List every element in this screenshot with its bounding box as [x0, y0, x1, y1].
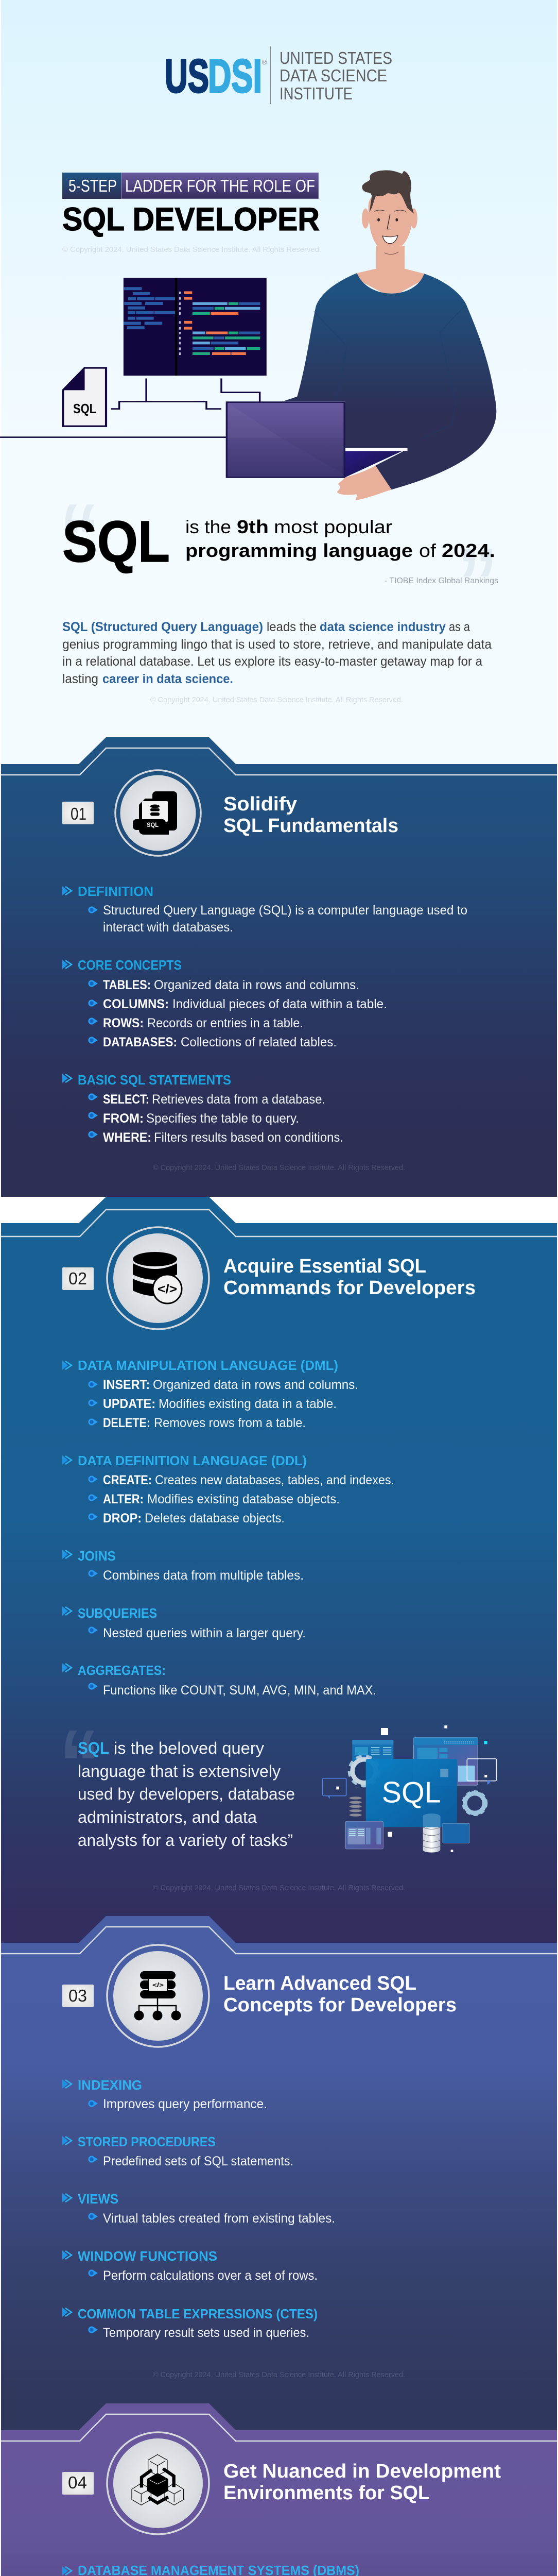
item: DML: [62, 1358, 358, 1430]
item: DDL: DATA DEFINITION LANGUAGE (DDL): [78, 1453, 307, 1468]
opening quote mark: “: [59, 484, 100, 593]
header logo: DSI: [208, 50, 262, 103]
SQL file label: SQL: [73, 401, 96, 416]
header logo: ®: [262, 58, 267, 66]
intro paragraph: lasting: [62, 672, 98, 686]
panel: step 04 development environments: [1, 2403, 557, 2576]
item: DML: DATA MANIPULATION LANGUAGE (DML): [78, 1358, 338, 1373]
item: joins: [62, 1548, 304, 1583]
item: basic SQL statements: FROM:: [103, 1111, 144, 1126]
item: core concepts: Collections of related tables.: [181, 1035, 337, 1049]
callout quote: used by developers, database: [78, 1785, 295, 1803]
icon: laptop: [226, 402, 408, 477]
item: window functions: [62, 2248, 318, 2283]
icon: database with code tag: [107, 1227, 209, 1329]
copyright: © Copyright 2024. United States Data Science Institute. All Rights Reserved.: [150, 696, 403, 704]
header logo: US: [165, 50, 209, 103]
item: definition: interact with databases.: [103, 920, 233, 935]
heading: [223, 1973, 457, 2016]
copyright: © Copyright 2024. United States Data Science Institute. All Rights Reserved.: [153, 1884, 405, 1892]
intro paragraph: SQL (Structured Query Language): [62, 620, 263, 634]
item: window functions: WINDOW FUNCTIONS: [78, 2248, 217, 2264]
item: joins: Combines data from multiple tables.: [103, 1568, 304, 1583]
item: aggregates: Functions like COUNT, SUM, AVG, MIN, and MAX.: [103, 1683, 376, 1698]
icon: database with code tag: </>: [158, 1282, 177, 1296]
stat quote: TIOBE ranking: of: [419, 540, 437, 561]
badge 02: [62, 1267, 94, 1290]
icon: connected cubes: [107, 2432, 209, 2534]
stat quote: TIOBE ranking: 2024.: [442, 540, 495, 561]
item: core concepts: ROWS:: [103, 1016, 144, 1030]
item: basic SQL statements: BASIC SQL STATEMENTS: [78, 1072, 231, 1088]
item: basic SQL statements: WHERE:: [103, 1130, 151, 1145]
item: basic SQL statements: SELECT:: [103, 1092, 149, 1107]
item: basic SQL statements: Specifies the table to query.: [146, 1111, 299, 1126]
icon: SQL document in circle: SQL: [147, 821, 159, 828]
heading: Commands for Developers: [223, 1277, 476, 1299]
header logo: UNITED STATES: [280, 48, 392, 67]
heading: Learn Advanced SQL: [223, 1973, 416, 1994]
icon: server hierarchy: </>: [152, 1981, 164, 1989]
item: common table expressions: Temporary result sets used in queries.: [103, 2326, 309, 2340]
copyright: © Copyright 2024. United States Data Science Institute. All Rights Reserved.: [153, 2371, 405, 2379]
item: common table expressions: COMMON TABLE EXPRESSIONS (CTES): [78, 2306, 318, 2321]
item: DDL: DROP:: [103, 1511, 142, 1526]
item: indexing: INDEXING: [78, 2077, 142, 2093]
badge 03: 03: [68, 1986, 87, 2005]
stat quote: TIOBE ranking: programming language: [185, 540, 413, 561]
icon: SQL file: [63, 368, 106, 426]
stat quote: TIOBE ranking: - TIOBE Index Global Rankings: [385, 577, 498, 585]
item: indexing: Improves query performance.: [103, 2097, 267, 2111]
panel: step 01 solidify SQL fundamentals: [1, 737, 557, 1197]
icon: SQL document in circle: [115, 770, 201, 856]
person: [283, 171, 496, 500]
table line: [0, 436, 228, 438]
badge 01: 01: [71, 804, 86, 823]
title banner: 5-STEP: [68, 176, 117, 195]
page background top: [1, 0, 557, 773]
icon: code monitor: [124, 278, 267, 376]
item: stored procedures: Predefined sets of SQL statements.: [103, 2154, 293, 2168]
item: common table expressions: [62, 2306, 318, 2340]
panel: step 03 advanced SQL concepts: [1, 1916, 557, 2430]
item: indexing: [62, 2077, 267, 2111]
badge 03: [62, 1985, 94, 2007]
item: DML: Organized data in rows and columns.: [153, 1378, 358, 1392]
copyright: © Copyright 2024. United States Data Science Institute. All Rights Reserved.: [62, 246, 321, 254]
item: views: VIEWS: [78, 2191, 118, 2207]
item: stored procedures: STORED PROCEDURES: [78, 2134, 216, 2149]
intro paragraph: [62, 620, 492, 686]
intro paragraph: leads the: [267, 620, 317, 634]
stat quote: TIOBE ranking: [59, 484, 498, 637]
item: subqueries: SUBQUERIES: [78, 1605, 157, 1621]
illustration: SQL panel with windows and gears: SQL: [382, 1776, 441, 1809]
item: definition: Structured Query Language (SQL) is a computer language used to: [103, 903, 467, 918]
title banner: LADDER FOR THE ROLE OF: [125, 176, 315, 195]
badge 02: 02: [68, 1269, 87, 1288]
item: subqueries: Nested queries within a larger query.: [103, 1626, 306, 1640]
header logo: DATA SCIENCE: [280, 66, 387, 85]
item: views: [62, 2191, 335, 2226]
item: core concepts: DATABASES:: [103, 1035, 177, 1049]
item: core concepts: TABLES:: [103, 978, 151, 992]
header logo: [165, 46, 392, 104]
item: core concepts: Individual pieces of data within a table.: [172, 997, 387, 1011]
item: aggregates: AGGREGATES:: [78, 1663, 166, 1678]
heading: [223, 1256, 476, 1299]
intro paragraph: career in data science.: [102, 672, 233, 686]
item: core concepts: COLUMNS:: [103, 997, 169, 1011]
item: joins: JOINS: [78, 1548, 116, 1564]
item: window functions: Perform calculations over a set of rows.: [103, 2268, 318, 2283]
closing quote mark: ”: [457, 528, 498, 637]
title: SQL Developer: SQL DEVELOPER: [62, 201, 320, 238]
heading: Environments for SQL: [223, 2482, 430, 2504]
header logo: INSTITUTE: [280, 84, 353, 103]
item: definition: [62, 884, 467, 935]
illustration: SQL panel with windows and gears: [323, 1725, 497, 1853]
stat quote: TIOBE ranking: SQL: [62, 509, 170, 574]
heading: Acquire Essential SQL: [223, 1256, 426, 1277]
item: DDL: [62, 1453, 394, 1526]
item: DML: DELETE:: [103, 1416, 150, 1430]
item: DML: INSERT:: [103, 1378, 150, 1392]
heading: Solidify: [223, 793, 297, 815]
item: DML: Removes rows from a table.: [154, 1416, 306, 1430]
item: subqueries: [62, 1605, 306, 1640]
item: core concepts: Records or entries in a table.: [147, 1016, 303, 1030]
item: definition: DEFINITION: [78, 884, 153, 899]
item: stored procedures: [62, 2134, 293, 2168]
intro paragraph: as a: [449, 620, 470, 634]
item: DML: Modifies existing data in a table.: [159, 1397, 337, 1411]
item: DDL: CREATE:: [103, 1473, 152, 1487]
badge 04: [62, 2472, 94, 2495]
item: basic SQL statements: Filters results based on conditions.: [154, 1130, 343, 1145]
item: aggregates: [62, 1663, 376, 1698]
callout quote: language that is extensively: [78, 1762, 281, 1781]
callout quote: analysts for a variety of tasks”: [78, 1831, 293, 1850]
heading: Concepts for Developers: [223, 1994, 457, 2016]
panel: step 02 essential SQL commands: [1, 1197, 557, 1943]
stat quote: TIOBE ranking: is the: [185, 516, 231, 537]
item: basic SQL statements: [62, 1072, 343, 1145]
copyright: © Copyright 2024. United States Data Science Institute. All Rights Reserved.: [153, 1164, 405, 1172]
item: DDL: Creates new databases, tables, and indexes.: [155, 1473, 394, 1487]
callout quote: administrators, and data: [78, 1808, 257, 1826]
icon: server hierarchy: [107, 1945, 209, 2047]
badge 04: 04: [68, 2473, 87, 2492]
item: basic SQL statements: Retrieves data from a database.: [152, 1092, 325, 1107]
item: core concepts: [62, 957, 387, 1049]
callout quote: “: [59, 1710, 100, 1819]
title banner: [62, 173, 319, 199]
callout quote: SQL: [78, 1739, 109, 1757]
badge 01: [62, 802, 94, 824]
intro paragraph: data science industry: [320, 620, 446, 634]
item: DML: UPDATE:: [103, 1397, 155, 1411]
heading: [223, 2461, 501, 2504]
item: core concepts: Organized data in rows and columns.: [154, 978, 359, 992]
item: DDL: Deletes database objects.: [145, 1511, 285, 1526]
intro paragraph: genius programming lingo that is used to store, retrieve, and manipulate data: [62, 637, 492, 652]
heading: SQL Fundamentals: [223, 815, 398, 837]
heading: [223, 793, 398, 837]
heading: Get Nuanced in Development: [223, 2461, 501, 2482]
intro paragraph: in a relational database. Let us explore its easy-to-master getaway map for a: [62, 654, 482, 669]
stat quote: TIOBE ranking: 9th: [237, 516, 269, 537]
illustration: developer at laptop with monitor: [0, 171, 496, 500]
item: DDL: ALTER:: [103, 1492, 144, 1506]
item: DDL: Modifies existing database objects.: [147, 1492, 340, 1506]
callout quote: [59, 1710, 295, 1850]
callout quote: is the beloved query: [114, 1739, 264, 1757]
stat quote: TIOBE ranking: most popular: [274, 516, 392, 537]
item: views: Virtual tables created from existing tables.: [103, 2211, 335, 2226]
item: core concepts: CORE CONCEPTS: [78, 957, 182, 973]
icon: circuit lines: [111, 379, 260, 409]
